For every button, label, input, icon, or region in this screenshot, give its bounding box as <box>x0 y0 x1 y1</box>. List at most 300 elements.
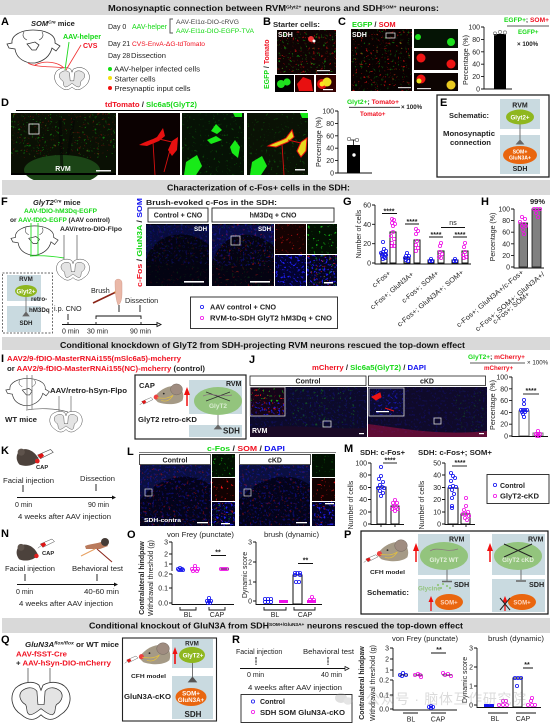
experiment timeline: 90 min <box>130 328 151 336</box>
axis values: 40 <box>363 222 371 229</box>
brain section <box>6 379 49 406</box>
timeline text: Day 28 <box>108 53 130 60</box>
mouse line title: SOM <box>31 19 49 28</box>
schematic box: GlyT2+ <box>183 652 204 659</box>
brush chart: brush (dynamic) <box>488 636 544 643</box>
category labels: c-Fos+; GluN3A+ <box>369 271 415 311</box>
retro virus label: AAV/retro-hSyn-Flpo <box>50 388 127 395</box>
brush chart: CAP <box>298 612 313 619</box>
panel P: schematic <box>344 529 548 614</box>
timeline: Facial injection <box>3 478 54 485</box>
experiment timeline <box>54 279 161 336</box>
timeline: Facial injection <box>5 566 55 573</box>
needles <box>26 375 71 412</box>
schematic box: RVM <box>226 381 242 388</box>
von Frey chart <box>359 636 458 723</box>
von Frey chart: 0.1 <box>379 692 389 700</box>
von Frey chart: 0.1 <box>158 586 168 592</box>
label Q: Q <box>1 634 10 646</box>
von Frey chart: von Frey (punctate) <box>392 636 458 643</box>
cell type legend: Starter cells <box>114 76 156 84</box>
connection arrow <box>516 124 524 144</box>
bars <box>381 232 468 263</box>
chart: c-Fos+; SOM+: 50 <box>433 460 441 468</box>
formula <box>468 354 549 372</box>
category labels: c-Fos+ <box>371 270 392 289</box>
virus text: or AAV2/9-fDIO-MasterRNAi155(NC)-mcherry (control) <box>7 366 205 373</box>
category labels: c-Fos+; GluN3A+/c-Fos+ <box>456 269 525 329</box>
axis values: 20 <box>502 253 510 260</box>
bar chart: percentage: 100 <box>322 108 334 116</box>
mouse line title: Cre <box>54 198 62 204</box>
mouse line title: or WT mice <box>74 642 119 649</box>
behavioral test illustration <box>81 538 112 562</box>
divider under heading <box>16 110 307 112</box>
SOM neuron: GluN3A+ <box>509 156 531 162</box>
bar chart: percentage: 0 <box>330 170 334 178</box>
chart titles <box>360 450 492 457</box>
category labels: c-Fos+; GluN3A+; SOM+ <box>396 269 465 329</box>
panel J: RVM knockdown images <box>249 354 549 440</box>
control micrograph <box>140 465 211 526</box>
virus text <box>7 356 205 373</box>
hM3Dq box <box>212 208 334 222</box>
legend <box>487 474 549 504</box>
legend: AAV control + CNO <box>210 304 277 312</box>
brush chart: 1 <box>248 580 252 586</box>
brush chart: ** <box>524 662 530 669</box>
brush chart: 2 <box>469 664 473 672</box>
formula: EGFP+ <box>518 29 539 36</box>
panel M: SDH cell counts <box>344 443 549 529</box>
heading: mCherry / Slc6a5(GlyT2) / DAPI <box>312 365 426 372</box>
von Frey chart: von Frey (punctate) <box>167 532 234 539</box>
bar chart: percentage: 20 <box>326 158 334 165</box>
divider <box>139 452 336 454</box>
control micrograph <box>250 387 367 437</box>
von Frey chart: 0.0 <box>158 600 168 608</box>
timeline: 4 weeks after AAV injection <box>18 514 111 521</box>
brush chart: Dynamic score <box>242 552 249 598</box>
timeline: Dissection <box>80 476 115 483</box>
cell type legend: AAV-helper infected cells <box>114 66 201 74</box>
RVM panel: RVM <box>512 102 528 110</box>
virus text <box>10 208 110 224</box>
WT circuit: GlyT2 WT <box>429 557 459 564</box>
timeline: 0 min <box>247 672 264 679</box>
main micrograph <box>351 29 412 91</box>
bar chart: percentage <box>488 374 548 440</box>
panel A: viral strategy <box>1 16 255 93</box>
panel E: schematic <box>437 95 549 177</box>
label P: P <box>344 529 351 541</box>
insets <box>275 224 337 286</box>
frame <box>361 531 548 614</box>
chart: c-Fos+; SOM+: 30 <box>433 485 441 492</box>
mouse with syringe: CAP <box>42 551 54 557</box>
brush chart <box>242 532 322 619</box>
knockdown circuit: SDH <box>529 580 544 589</box>
watermark: 公众号 · 脑体互作研究院 <box>366 691 526 707</box>
chart: c-Fos+; SOM+: 40 <box>433 472 441 480</box>
control insets <box>212 454 235 526</box>
formula: Glyt2+; Tomato+ <box>347 99 399 106</box>
von Frey chart: 0.0 <box>379 706 389 714</box>
brush chart: BL <box>491 716 499 723</box>
significance marks: **** <box>431 232 442 239</box>
timeline <box>236 649 354 692</box>
timeline text: Day 21 <box>108 41 130 48</box>
von Frey chart: BL <box>184 612 192 619</box>
category labels <box>456 269 546 333</box>
von Frey chart: CAP <box>210 612 225 619</box>
label C: C <box>338 16 346 28</box>
red injection line <box>28 45 81 70</box>
chart: c-Fos+: 0 <box>363 522 367 528</box>
bar chart: percentage: Percentage (%) <box>461 35 470 85</box>
section header: GlyT2 knockdown: Conditional knockdown of GlyT2 from SDH-projecting RVM neurons rescued the top-down effect <box>60 340 465 350</box>
bar chart: percentage: 20 <box>472 74 480 81</box>
schematic box: SDH <box>185 710 202 719</box>
schematic box: GluN3A-cKO <box>124 694 172 701</box>
dashed circuit box <box>2 273 52 333</box>
chart: c-Fos+; SOM+: Number of cells <box>419 480 426 529</box>
section header: c-Fos characterization <box>2 180 550 195</box>
timeline: 0 min <box>16 589 33 596</box>
formula: Tomato+ <box>360 111 386 118</box>
knockdown circuit: GlyT2 cKD <box>502 557 534 564</box>
cKD label <box>240 454 310 464</box>
legend <box>241 694 352 722</box>
WT circuit: RVM <box>449 536 465 544</box>
timeline <box>3 476 116 521</box>
legend: RVM-to-SDH GlyT2 hM3Dq + CNO <box>210 316 333 322</box>
spinal cord outline <box>55 68 89 90</box>
chart: c-Fos+: 40 <box>359 497 367 504</box>
von Frey chart: Withdrawal threshold (g) <box>148 540 155 616</box>
section header: monosynaptic connection: neurons and SDH <box>301 3 382 13</box>
schematic box: CAP <box>139 381 155 390</box>
bar chart: percentage: 60 <box>326 133 334 140</box>
knockdown circuit: RVM <box>528 536 544 544</box>
schematic box <box>135 375 246 439</box>
bar chart: percentage: Percentage (%) <box>488 380 497 430</box>
virus text: AAV-fDIO-hM3Dq-EGFP <box>24 208 97 215</box>
brain section <box>11 226 58 255</box>
y axis title: Number of cells <box>356 209 363 258</box>
panel F: chemogenetic activation <box>1 196 161 336</box>
von Frey chart: Contralateral hindpaw <box>139 541 146 615</box>
WT circuit <box>418 534 470 612</box>
section header: monosynaptic connection: neurons: <box>397 3 439 13</box>
bar chart: percentage: 100 <box>468 24 480 32</box>
axis values: 40 <box>502 241 510 248</box>
experiment timeline: Brush <box>91 286 110 295</box>
timeline: Behavioral test <box>303 649 354 656</box>
section header: GluN3A knockout: Conditional knockout of GluN3A from SDH <box>89 620 259 630</box>
hM3Dq micrograph <box>212 224 274 286</box>
bar chart: percentage: 40 <box>500 410 508 417</box>
merged inset <box>247 113 308 175</box>
cKD micrograph <box>368 387 487 437</box>
significance marks: ns <box>449 220 457 227</box>
von Frey chart: 1 <box>164 562 168 568</box>
mouse line title: mice <box>56 19 75 28</box>
schematic box <box>122 638 216 721</box>
control micrograph: RVM <box>252 428 268 435</box>
panel I: knockdown strategy <box>1 353 246 439</box>
timeline text: AAV-EI1α-DIO-EGFP-TVA <box>176 28 255 35</box>
description: connection <box>450 140 491 147</box>
section header: GluN3A knockout <box>2 618 550 633</box>
axes <box>511 209 544 268</box>
label D: D <box>1 97 9 109</box>
green channel inset <box>182 113 244 175</box>
bar chart: percentage: **** <box>526 388 537 395</box>
virus text: AAV2/9-fDIO-MasterRNAi155(mSlc6a5)-mcherry <box>7 356 181 363</box>
RVM overview micrograph: RVM <box>55 166 71 173</box>
vertical channel label: c-Fos / GluN3A / SOM <box>137 198 144 287</box>
axis values <box>363 202 371 268</box>
dashed circuit box: RVM <box>19 276 33 283</box>
brush chart: 0 <box>248 598 252 606</box>
panel L: SDH micrographs <box>127 446 336 526</box>
section header: monosynaptic connection: SOM+ <box>382 4 397 10</box>
von Frey chart: 3 <box>164 540 168 546</box>
chart: c-Fos+; SOM+: **** <box>455 460 466 467</box>
needles <box>64 235 77 259</box>
significance marks: **** <box>407 219 418 226</box>
virus text: + AAV-hSyn-DIO-mCherry <box>16 660 111 668</box>
panel D: RVM tdTomato and GlyT2 <box>1 97 423 185</box>
brush chart: 2 <box>248 560 252 566</box>
axis values: 0 <box>367 260 371 268</box>
experiment timeline: i.p. CNO <box>54 304 82 313</box>
cKD micrograph <box>239 465 310 526</box>
cKD label: cKD <box>420 378 434 386</box>
chart: c-Fos+: **** <box>385 458 396 464</box>
schematic box: GluN3A+ <box>178 697 205 704</box>
panel Q: knockout strategy <box>1 634 216 721</box>
von Frey chart: ** <box>436 647 442 654</box>
formula: mCherry+ <box>484 365 513 372</box>
chart: c-Fos+: 80 <box>359 472 367 480</box>
control label: Control <box>296 378 320 386</box>
chart: c-Fos+: 60 <box>359 485 367 492</box>
legend: Control <box>260 699 285 706</box>
timeline: Facial injection <box>236 649 282 656</box>
timeline text: Dissection <box>131 53 166 60</box>
axis values <box>498 206 510 272</box>
timeline text: CVS-EnvA-ΔG-tdTomato <box>132 41 206 48</box>
99 percent callout: 99% <box>530 197 545 206</box>
timeline text: AAV-helper <box>132 24 168 31</box>
label N: N <box>1 528 9 540</box>
timeline: Behavioral test <box>72 566 123 573</box>
formula: × 100% <box>527 360 549 366</box>
bar chart: percentage: 40 <box>472 62 480 69</box>
axes <box>372 205 471 264</box>
injection tracks <box>30 223 64 258</box>
virus text: AAV-fSST-Cre <box>16 652 67 658</box>
control label <box>250 376 366 386</box>
hM3Dq box: hM3Dq + CNO <box>250 212 297 220</box>
axis values: 100 <box>498 206 510 214</box>
spinal cord <box>50 411 82 432</box>
mouse line title: mice <box>61 198 81 207</box>
significance marks <box>382 208 467 239</box>
chart: c-Fos+: 20 <box>359 510 367 516</box>
description <box>443 113 495 147</box>
section header: GlyT2 knockdown <box>2 337 550 350</box>
panel O: behavior charts <box>127 529 322 619</box>
SOM neuron <box>503 146 537 164</box>
formula: GlyT2+; mCherry+ <box>468 354 525 361</box>
bar chart: percentage: 40 <box>326 146 334 153</box>
heading: tdTomato / Slc6a5(GlyT2) <box>105 102 197 109</box>
timeline: 4 weeks after AAV injection <box>248 685 342 692</box>
virus text: or AAV-fDIO-EGFP (AAV control) <box>10 217 110 224</box>
mouse line title: GlyT2 <box>33 198 55 207</box>
bars <box>519 209 541 267</box>
section header: monosynaptic connection: Glyt2+ <box>286 4 302 10</box>
bar chart: percentage: 80 <box>326 121 334 128</box>
timeline <box>5 566 123 608</box>
brush chart: Dynamic score <box>462 657 469 703</box>
timeline: 4 weeks after AAV injection <box>19 601 113 608</box>
formula: EGFP+; SOM+ <box>504 17 549 24</box>
virus text <box>16 652 111 668</box>
chart titles: SDH: c-Fos+ <box>360 450 405 457</box>
retro virus label: AAV/retro-DIO-Flpo <box>60 226 122 233</box>
panel R: timeline and charts <box>232 634 544 723</box>
data points <box>379 217 468 263</box>
bar chart: percentage: 100 <box>496 374 508 382</box>
heading: c-Fos / SOM / DAPI <box>207 446 285 453</box>
panel G: c-Fos cell counts <box>343 196 471 329</box>
mouse line title: Cre <box>48 20 56 24</box>
axis values: 60 <box>363 202 371 210</box>
brush chart: ** <box>303 558 308 564</box>
formula: × 100% <box>401 104 423 111</box>
dashed circuit box: Glyt2+ <box>16 288 36 295</box>
WT circuit: SOM+ <box>440 600 458 606</box>
bar chart: percentage: 80 <box>472 37 480 44</box>
cell type legend: Presynaptic input cells <box>114 86 191 93</box>
knockdown circuit: SOM+ <box>513 600 531 606</box>
schematic label: Schematic: <box>367 590 409 597</box>
control micrograph: SDH <box>194 226 208 233</box>
RVM overview micrograph <box>11 113 116 185</box>
cKD label <box>368 376 486 386</box>
schematic box: GlyT2 <box>209 403 227 410</box>
significance marks: **** <box>455 232 466 239</box>
label A: A <box>1 16 9 28</box>
main micrograph: SDH <box>352 32 367 39</box>
timeline text: Day 0 <box>108 24 126 31</box>
CVS label: CVS <box>83 43 98 50</box>
von Frey chart: Contralateral hindpaw <box>359 646 366 720</box>
label K: K <box>1 445 9 457</box>
panel K: CAP timeline <box>1 445 116 521</box>
bar chart: percentage <box>461 24 512 94</box>
von Frey chart: 1 <box>385 668 389 674</box>
brush chart: 0 <box>469 702 473 710</box>
dashed circuit box: hM3Dq <box>29 307 50 314</box>
mouse line title: flox/flox <box>54 640 74 646</box>
label L: L <box>127 446 134 458</box>
formula: × 100% <box>517 41 539 48</box>
Control box: Control + CNO <box>154 212 203 220</box>
axis values: 0 <box>506 264 510 272</box>
injection lines <box>65 42 69 70</box>
cKD insets <box>312 454 335 526</box>
AAV-helper label: AAV-helper <box>63 34 101 41</box>
von Frey chart: 2 <box>164 552 168 558</box>
section header: monosynaptic connection: Monosynaptic connection between RVM <box>108 3 268 13</box>
main micrograph: SDH <box>278 32 293 39</box>
panel H: percentage bars <box>456 196 546 333</box>
significance marks: **** <box>384 208 395 216</box>
category labels: c-Fos+; SOM+ <box>401 270 440 305</box>
data points <box>518 207 542 236</box>
spinal cord <box>12 682 70 719</box>
control micrograph <box>146 224 209 286</box>
timeline: 40 min <box>321 672 342 679</box>
legend <box>190 297 338 328</box>
bar chart: percentage: 0 <box>476 86 480 94</box>
Control box <box>148 208 208 222</box>
axis values: 20 <box>363 241 371 248</box>
WT circuit: SDH <box>454 580 469 589</box>
von Frey chart <box>139 532 234 619</box>
category labels: c-Fos+; SOM+ <box>492 291 531 326</box>
cell type legend <box>108 66 201 93</box>
label R: R <box>232 634 240 646</box>
section header: GluN3A knockout: SOM+/GluN3A+ <box>269 622 305 627</box>
heading: Brush-evoked c-Fos in the SDH: <box>146 198 277 207</box>
brush chart: 3 <box>248 540 252 546</box>
schematic box: RVM <box>185 640 199 648</box>
red upward arrows <box>413 543 493 562</box>
chart: c-Fos+; SOM+: 20 <box>433 497 441 504</box>
CFH mouse <box>364 540 408 576</box>
label J: J <box>249 354 255 366</box>
control label <box>140 454 210 464</box>
section header: monosynaptic connection <box>0 0 550 15</box>
von Frey chart: 0.2 <box>158 572 168 578</box>
chart: c-Fos+; SOM+: 10 <box>433 510 441 516</box>
label M: M <box>344 443 353 455</box>
insets <box>414 29 458 91</box>
chart: c-Fos+; SOM+ <box>419 460 475 529</box>
timeline: 40-60 min <box>84 589 119 596</box>
chart titles: SDH: c-Fos+; SOM+ <box>418 450 492 457</box>
panel B: starter cells <box>263 16 336 92</box>
schematic box: GlyT2 retro-cKD <box>138 417 197 424</box>
description: Monosynaptic <box>443 131 495 138</box>
chart: c-Fos+: 100 <box>355 460 367 468</box>
brush chart <box>462 636 544 723</box>
heading: EGFP / SOM <box>352 20 396 29</box>
y axis title: Percentage (%) <box>490 213 497 261</box>
CFH mouse: CFH model <box>370 570 405 576</box>
insets <box>275 75 336 92</box>
legend: SDH SOM GluN3A-cKO <box>260 710 346 717</box>
chart: c-Fos+; SOM+: 0 <box>437 522 441 528</box>
category labels <box>369 269 465 329</box>
von Frey chart: Withdrawal threshold (g) <box>370 645 377 721</box>
